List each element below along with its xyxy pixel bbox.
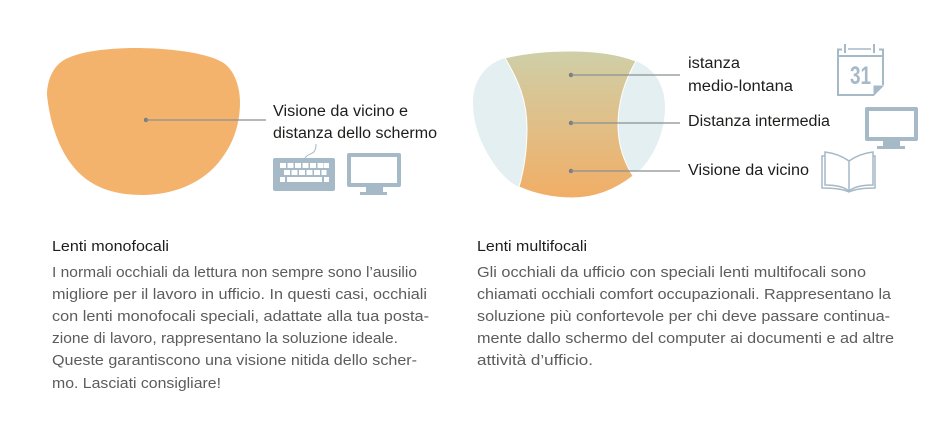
icon: keyboard [273, 144, 335, 191]
text: multifocal description: Gli occhiali da ufficio con speciali lenti multifocali sono [477, 265, 866, 281]
label: near vision: Visione da vicino [688, 162, 809, 179]
leader lines: multifocal [569, 73, 680, 173]
text: monofocal description: Queste garantiscono una visione nitida dello scher- [52, 353, 417, 369]
icon: open book [822, 152, 875, 192]
heading: monofocal lenses: Lenti monofocali [52, 238, 169, 255]
text: multifocal description: mente dallo schermo del computer ai documenti e ad altre [477, 331, 894, 347]
label: near vision and screen distance: distanza dello schermo [273, 125, 437, 142]
lens: monofocal [47, 48, 240, 195]
text: multifocal description: chiamati occhiali comfort occupazionali. Rappresentano la [477, 287, 892, 303]
lens: multifocal side zones [473, 58, 665, 187]
text: monofocal description: I normali occhiali da lettura non sempre sono l’ausilio [52, 265, 417, 281]
text: multifocal description: attività d’ufficio. [477, 353, 593, 369]
heading: multifocal lenses: Lenti multifocali [477, 238, 587, 255]
text: monofocal description: mo. Lasciati consigliare! [52, 376, 221, 392]
leader line: monofocal [144, 118, 266, 122]
label: intermediate distance: Distanza intermedia [688, 113, 830, 130]
text: monofocal description: con lenti monofocali speciali, adattate alla tua posta- [52, 309, 429, 325]
lens: multifocal progressive corridor [505, 51, 636, 198]
icon: calendar [838, 44, 884, 96]
label: medium-far distance: istanza [688, 55, 740, 72]
label: near vision and screen distance: Visione da vicino e [273, 103, 408, 120]
icon: monitor left [347, 153, 401, 195]
text: multifocal description: soluzione più confortevole per chi deve passare continua- [477, 309, 890, 325]
label: medium-far distance: medio-lontana [688, 78, 793, 95]
icon: monitor right [865, 107, 918, 149]
icon: calendar: 31 [850, 62, 871, 90]
text: monofocal description: zione di lavoro, rappresentano la soluzione ideale. [52, 331, 398, 347]
text: monofocal description: migliore per il lavoro in ufficio. In questi casi, occhiali [52, 287, 427, 303]
